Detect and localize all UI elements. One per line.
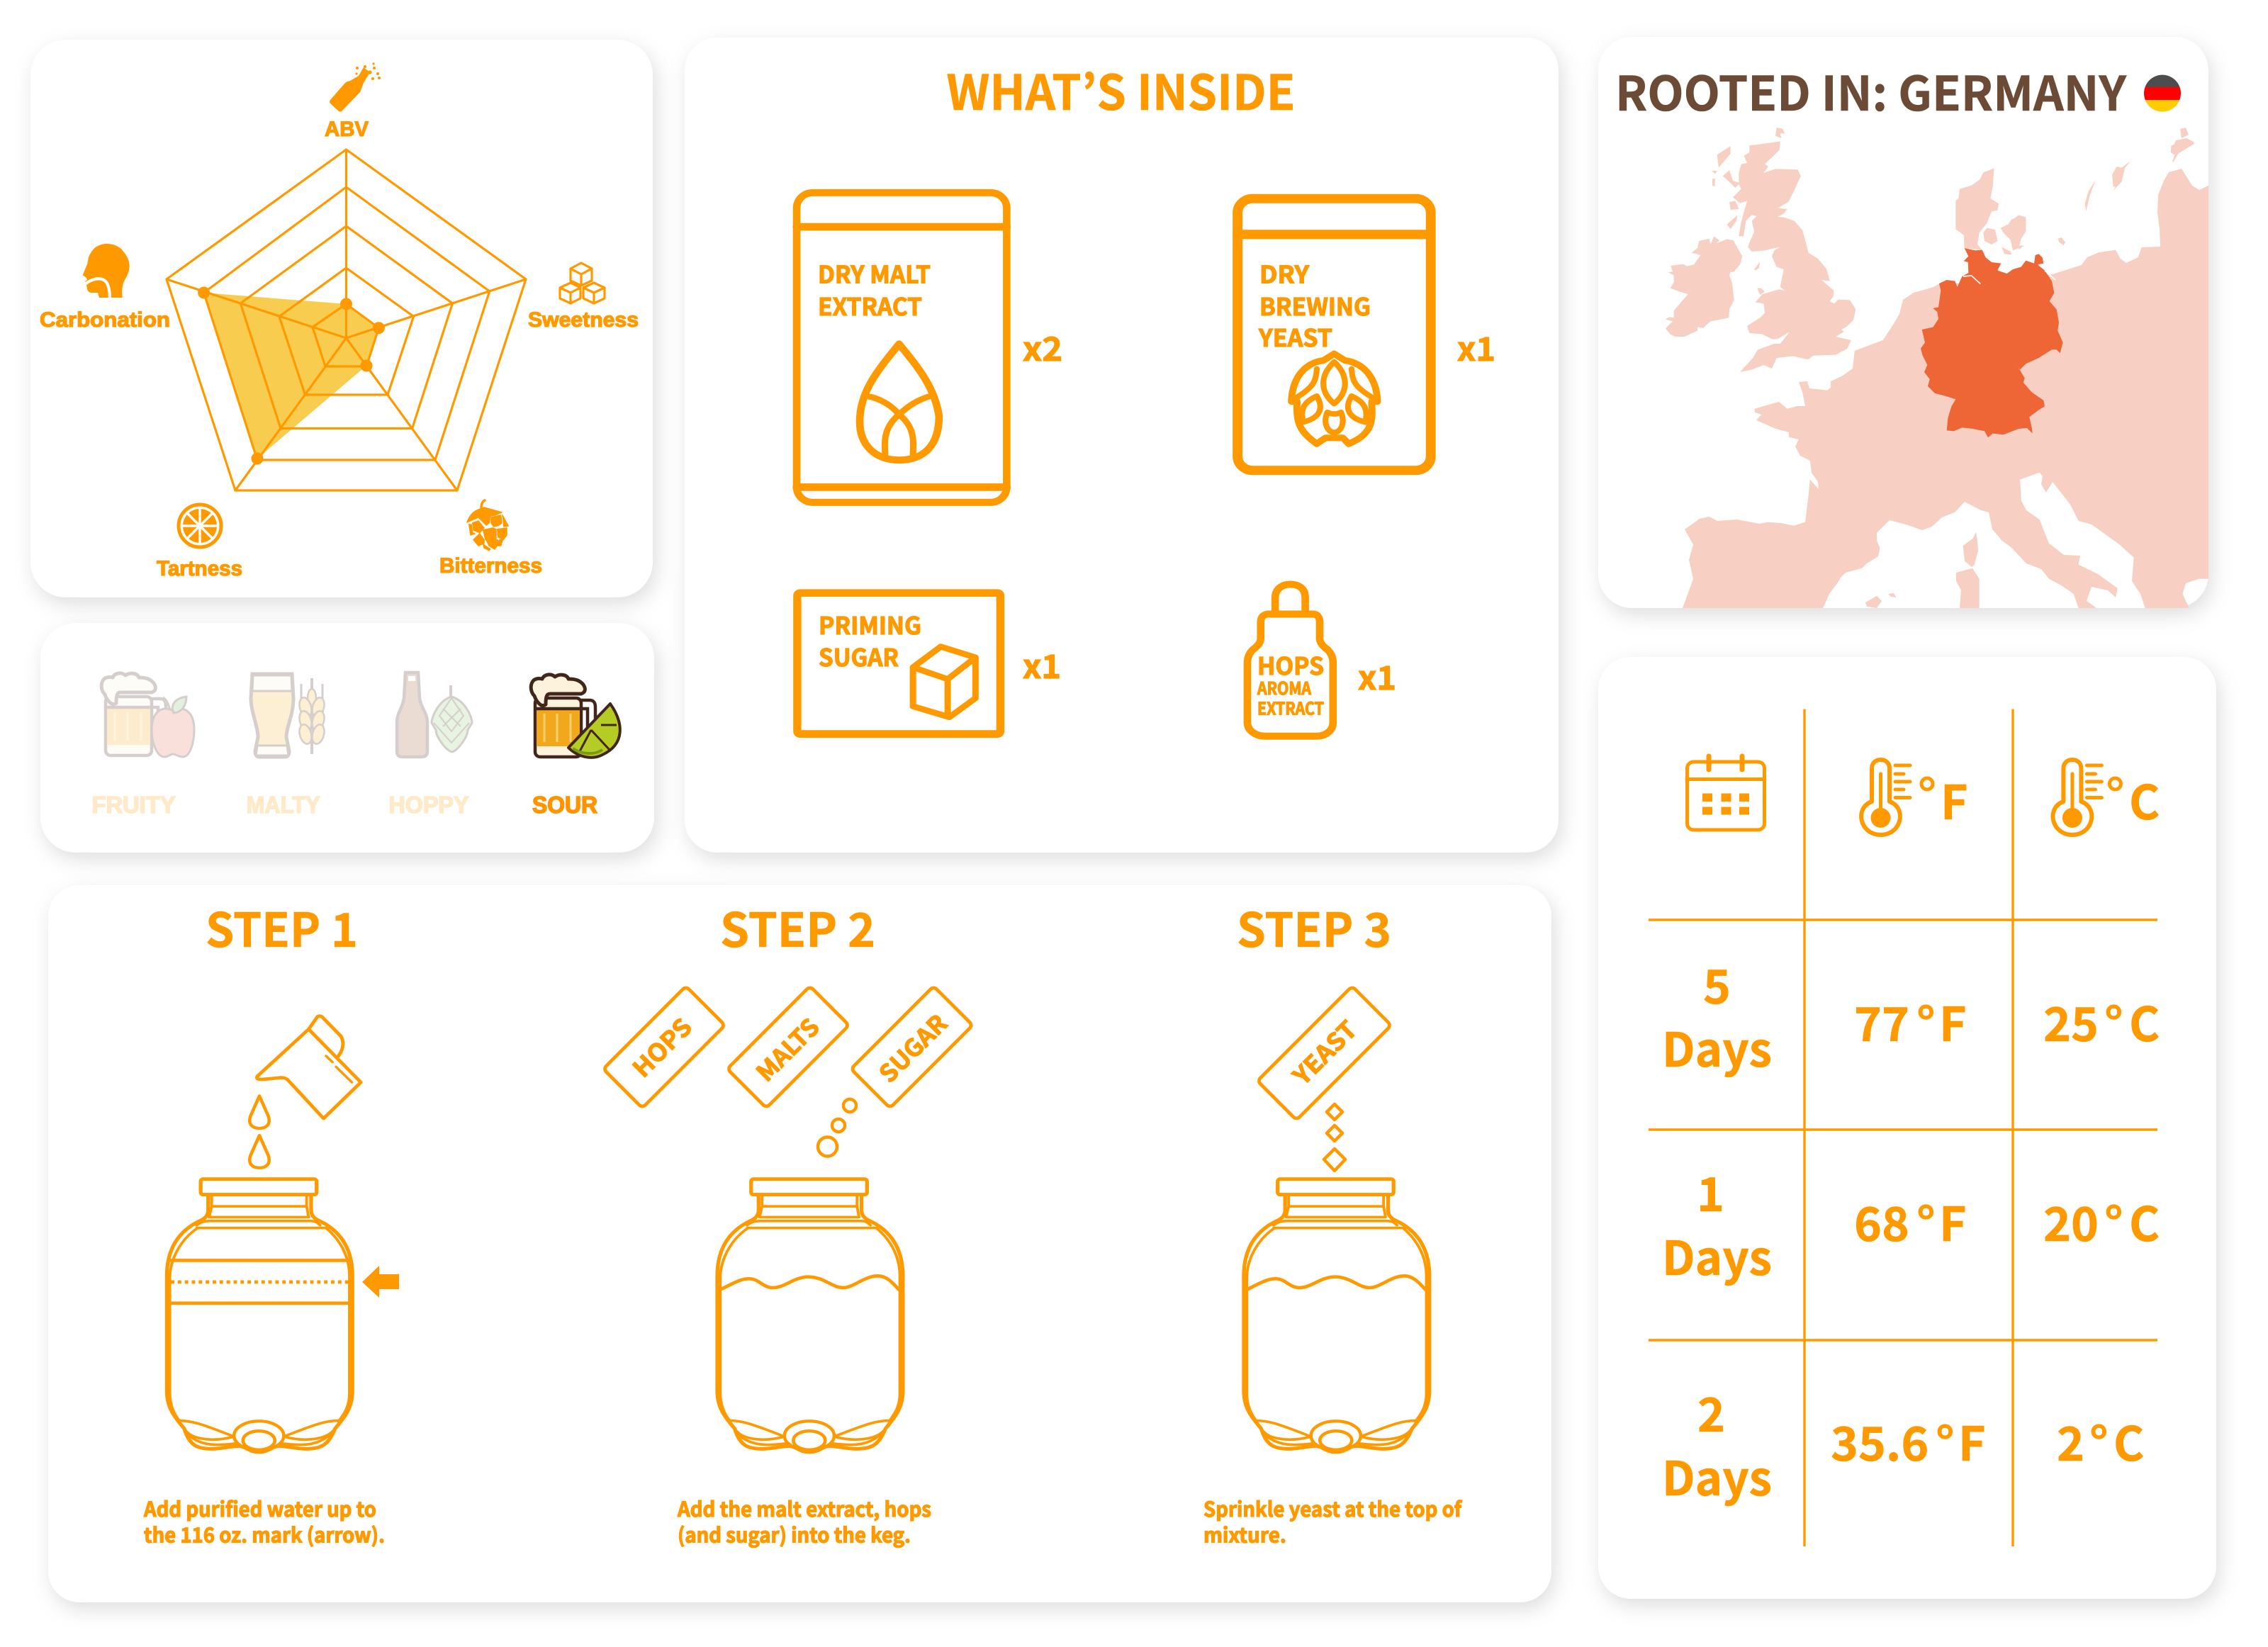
row: 2 days: °	[2089, 1407, 2109, 1475]
icon: German flag	[2144, 74, 2181, 113]
map of Europe	[1666, 128, 2208, 608]
icon: thermometer Fahrenheit	[1861, 760, 1933, 835]
packet: malts: MALTS	[747, 1009, 826, 1088]
row: 5 days: C	[2129, 987, 2160, 1055]
caption: step 1	[143, 1493, 385, 1549]
caption: step 2: (and sugar) into the keg.	[678, 1519, 911, 1549]
label: Sweetness: Sweetness	[528, 308, 639, 332]
label: HOPPY: HOPPY	[388, 792, 469, 818]
label: ABV: ABV	[325, 118, 369, 141]
icon: champagne bottle	[330, 62, 381, 112]
arrow: fill mark	[362, 1266, 399, 1298]
label: Tartness: Tartness	[157, 557, 242, 580]
icon: thermometer Celsius	[2053, 760, 2121, 835]
row: 5 days: F	[1939, 987, 1967, 1055]
label: MALTY: MALTY	[247, 792, 320, 818]
header: C: C	[2129, 765, 2160, 833]
caption: step 2: Add the malt extract, hops	[677, 1493, 931, 1523]
row: 2 days: C	[2113, 1407, 2144, 1475]
radar chart	[167, 150, 526, 490]
quantity: x2	[1023, 324, 1062, 371]
map: Germany	[1921, 248, 2063, 437]
packet: sugar	[851, 986, 972, 1108]
icon: keg at step 3	[1244, 1179, 1430, 1452]
row: 5 days: °	[1916, 987, 1936, 1055]
caption: step 3: mixture.	[1203, 1519, 1286, 1549]
packet: hops	[603, 986, 725, 1108]
row: 1 days: F	[1939, 1187, 1967, 1255]
text: HOPS	[1257, 647, 1324, 682]
row: 5 days	[1662, 950, 2160, 1081]
panel: flavour radar	[30, 40, 653, 597]
icon: malty glass and wheat	[251, 674, 326, 757]
heading: step 2: STEP 2	[720, 893, 875, 961]
row: 2 days: 2	[2057, 1407, 2084, 1475]
row: 1 days: °	[2104, 1187, 2123, 1255]
row: 1 days: Days	[1662, 1221, 1772, 1289]
text: EXTRACT	[818, 288, 922, 322]
table grid	[1649, 709, 2157, 1546]
row: 2 days	[1662, 1378, 2144, 1510]
row: 5 days: °	[2104, 987, 2123, 1055]
row: 5 days: Days	[1662, 1013, 1772, 1081]
quantity: x1	[1023, 641, 1061, 688]
label: FRUITY: FRUITY	[92, 792, 176, 818]
yeast granules	[1324, 1104, 1345, 1171]
text: DRY MALT	[818, 256, 931, 291]
row: 1 days: °	[1916, 1187, 1936, 1255]
row: 2 days: F	[1958, 1407, 1986, 1475]
label: Bitterness: Bitterness	[439, 554, 542, 578]
icon: pitcher pouring water	[249, 1016, 361, 1168]
text: YEAST	[1258, 319, 1332, 354]
text: DRY	[1259, 256, 1309, 291]
row: 1 days: 68	[1854, 1187, 1909, 1255]
icon: hop cone	[467, 500, 508, 551]
heading: step 3: STEP 3	[1237, 893, 1391, 961]
icon: calendar	[1687, 756, 1765, 830]
panel: fermentation table	[1598, 657, 2216, 1599]
row: 1 days: 1	[1697, 1157, 1724, 1225]
packet: malts	[727, 986, 849, 1108]
map: surrounding countries	[1666, 128, 2208, 608]
panel: brewing steps	[48, 885, 1551, 1602]
quantity: x1	[1358, 653, 1396, 699]
caption: step 1: Add purified water up to	[143, 1493, 376, 1523]
row: 2 days: Days	[1662, 1441, 1772, 1510]
caption: step 3: Sprinkle yeast at the top of	[1203, 1493, 1462, 1523]
header: F: F	[1941, 765, 1968, 833]
icon: keg at step 1	[167, 1179, 352, 1452]
label: SOUR: SOUR	[532, 792, 597, 818]
caption: step 3	[1203, 1493, 1462, 1549]
item: dry malt extract packet	[797, 193, 1006, 502]
heading: WHAT’S INSIDE	[947, 54, 1296, 124]
text: BREWING	[1259, 288, 1371, 322]
text: EXTRACT	[1257, 695, 1324, 720]
packet: yeast	[1257, 986, 1391, 1120]
text: SUGAR	[819, 639, 899, 673]
row: 5 days: 25	[2043, 987, 2099, 1055]
row: 2 days: 35.6	[1831, 1407, 1929, 1475]
data points	[198, 286, 385, 465]
text: AROMA	[1257, 675, 1312, 699]
quantity: x1	[1457, 324, 1495, 371]
row: 1 days: 20	[2043, 1187, 2099, 1255]
row: 2 days: 2	[1697, 1378, 1725, 1446]
caption: step 1: the 116 oz. mark (arrow).	[144, 1519, 385, 1549]
row: 1 days: C	[2129, 1187, 2160, 1255]
icon: keg at step 2	[717, 1179, 903, 1452]
radar grid	[167, 150, 526, 490]
icon: sour mug and lime	[531, 675, 620, 758]
heading: step 1: STEP 1	[206, 893, 358, 961]
icon: fruity mug and apple	[101, 673, 194, 757]
item: dry brewing yeast packet	[1237, 198, 1431, 471]
row: 5 days: 5	[1703, 950, 1731, 1018]
packet: hops: HOPS	[624, 1009, 698, 1084]
item: hops aroma extract bottle	[1247, 584, 1333, 736]
text: PRIMING	[819, 607, 921, 641]
panel: beer styles	[40, 623, 654, 853]
packet: sugar: SUGAR	[870, 1006, 954, 1089]
icon: sugar cubes	[560, 263, 605, 303]
panel: what's inside	[685, 38, 1559, 853]
icon: orange slice	[179, 505, 221, 547]
caption: step 2	[677, 1493, 931, 1549]
label: Carbonation: Carbonation	[40, 308, 170, 332]
row: 5 days: 77	[1854, 987, 1909, 1055]
item: priming sugar box	[797, 593, 1000, 734]
row: 1 days	[1662, 1157, 2160, 1289]
panel: rooted in Germany	[1598, 37, 2208, 608]
icon: head and throat	[83, 244, 130, 299]
data polygon	[204, 293, 378, 459]
bubbles: ingredients	[818, 1099, 856, 1157]
row: 2 days: °	[1936, 1407, 1955, 1475]
packet: yeast: YEAST	[1284, 1012, 1364, 1092]
heading: ROOTED IN: GERMANY	[1615, 56, 2127, 125]
icon: hoppy bottle and hop	[397, 673, 472, 757]
